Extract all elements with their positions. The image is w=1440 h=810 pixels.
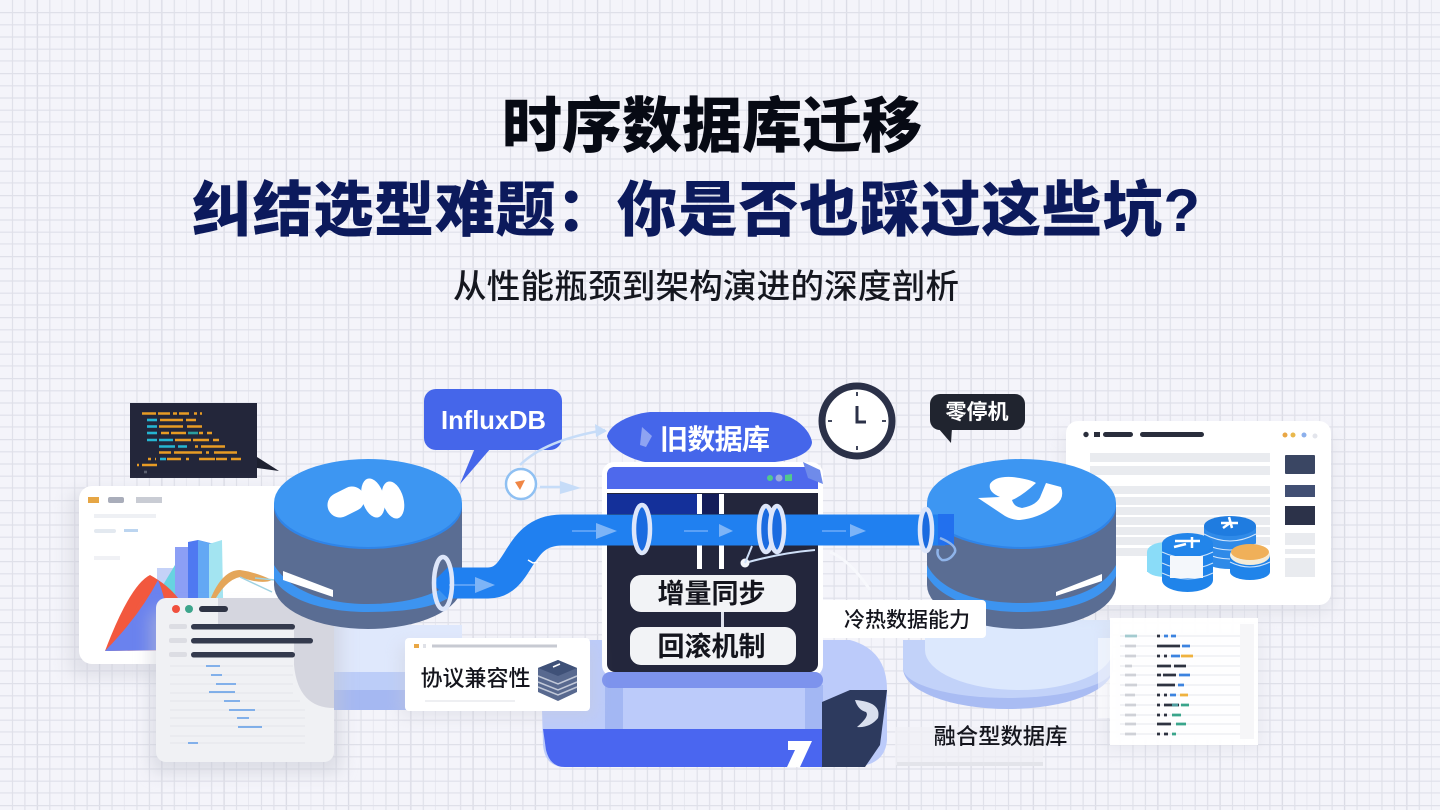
panel: grey code card xyxy=(150,598,342,774)
panel: right dashboard card xyxy=(1062,421,1334,615)
converged database label xyxy=(895,724,1067,766)
sync label: 增量同步 xyxy=(658,579,766,609)
protocol compatibility card: 协议兼容性 xyxy=(420,666,531,691)
hot and cold data capability label: 冷热数据能力 xyxy=(844,609,970,632)
pipe flow arrows xyxy=(449,531,846,585)
panel: code terminal xyxy=(130,403,279,478)
rollback label: 回滚机制 xyxy=(658,632,766,662)
connector: valve node line xyxy=(740,546,870,590)
sync label xyxy=(630,575,796,612)
protocol compatibility card xyxy=(400,638,595,717)
zero downtime bubble: 零停机 xyxy=(946,401,1008,424)
panel: InfluxDB bubble: InfluxDB xyxy=(441,405,546,435)
chart: layered areas and bars xyxy=(105,540,275,651)
rollback label xyxy=(630,627,796,665)
panel: left area chart card xyxy=(68,486,294,678)
title line 1: 时序数据库迁移 xyxy=(502,93,922,160)
converged database label: 融合型数据库 xyxy=(934,724,1067,749)
panel: right data table xyxy=(1098,618,1261,750)
panel: InfluxDB bubble xyxy=(424,389,562,484)
ghost base: right cylinder reflection xyxy=(903,620,1113,709)
dark corner block with white mark xyxy=(822,690,887,767)
panel: central migration panel xyxy=(602,462,823,688)
left database cylinder xyxy=(274,459,462,629)
ghost base: central platform xyxy=(540,640,887,767)
icon: server stack xyxy=(538,660,577,701)
arrow: migration pipe xyxy=(432,505,955,609)
old database pill: 旧数据库 xyxy=(660,424,770,455)
title line 2: 纠结选型难题：你是否也踩过这些坑? xyxy=(192,177,1200,244)
subtitle: 从性能瓶颈到架构演进的深度剖析 xyxy=(453,269,959,306)
ghost base: left cylinder reflection xyxy=(334,625,462,710)
icon: left database logo xyxy=(340,476,408,521)
icon: flow gauge xyxy=(506,424,607,499)
hot and cold data capability label xyxy=(820,600,986,638)
zero downtime bubble xyxy=(930,394,1025,443)
icon: clock xyxy=(822,386,892,456)
old database pill xyxy=(607,412,812,462)
pipe couplings xyxy=(434,505,932,609)
icon: stacked coins xyxy=(1147,516,1270,592)
right database cylinder xyxy=(927,459,1116,629)
icon: right database logo xyxy=(978,477,1062,520)
